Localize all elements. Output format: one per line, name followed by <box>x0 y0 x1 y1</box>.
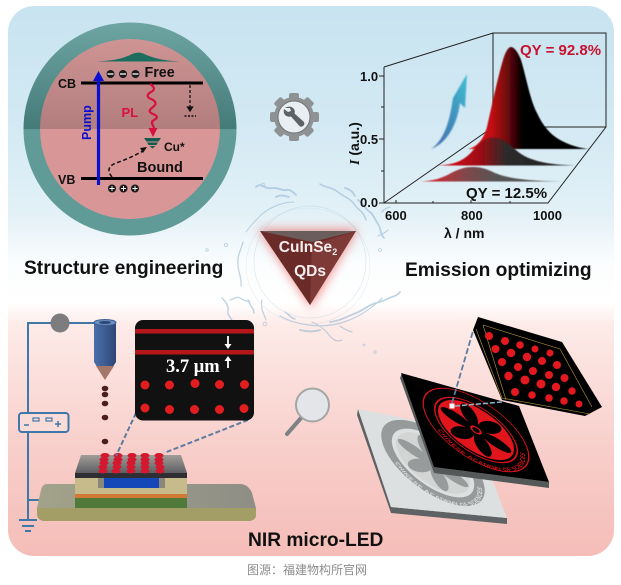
chart frame in perspective <box>384 33 606 203</box>
y axis tick labels: 0.0 <box>360 195 378 210</box>
icon: magnifying glass <box>287 388 329 434</box>
x axis tick labels: 1000 <box>533 208 562 223</box>
icon: gear with wrench <box>270 93 319 141</box>
micro-LED device <box>37 453 256 521</box>
x axis tick labels: 800 <box>461 208 483 223</box>
nonradiative dashed decay <box>184 85 196 116</box>
QD label: 2 <box>332 247 337 257</box>
substrate plate <box>37 484 256 521</box>
x axis tick labels: 600 <box>385 208 407 223</box>
x axis title: λ / nm <box>444 225 484 241</box>
battery <box>19 413 68 432</box>
water splash swirl <box>206 183 400 353</box>
circular band diagram <box>24 22 236 235</box>
grey emblem <box>381 420 485 506</box>
y axis ticks <box>379 76 510 203</box>
bound holes <box>108 184 139 192</box>
black emission plate with emblem <box>400 373 549 488</box>
layer stack <box>75 478 187 508</box>
band labels: VB <box>58 173 75 187</box>
top contact layer <box>75 455 187 478</box>
label: QY 92.8%: QY = 92.8% <box>520 42 601 59</box>
CB and VB lines <box>81 83 203 178</box>
x axis tick labels <box>385 208 562 223</box>
meter node <box>50 314 70 332</box>
magnified pixel block <box>473 317 602 416</box>
PL wavy arrow <box>148 84 158 137</box>
heading: emission optimizing: Emission optimizing <box>405 260 592 281</box>
QD label: CuInSe <box>279 239 332 256</box>
pixel selection dashed callout <box>449 331 502 409</box>
QD label <box>279 239 337 280</box>
red emblem <box>422 388 530 472</box>
red line pattern <box>135 329 254 354</box>
inset: micrograph <box>135 320 254 420</box>
CuInSe2 quantum dot triangle <box>258 229 358 308</box>
spectrum: mid QY peak <box>438 138 575 166</box>
Cu trap state <box>144 138 161 148</box>
free electrons <box>106 70 140 78</box>
label: Bound: Bound <box>137 160 183 176</box>
printing nozzle <box>94 320 116 380</box>
pump label: Pump <box>80 105 94 140</box>
heading: structure engineering: Structure engineering <box>24 258 223 279</box>
y axis tick labels: 1.0 <box>360 69 378 84</box>
width label: 3.7 μm <box>166 357 220 377</box>
zoom guide dashed lines <box>116 413 248 456</box>
label: PL: PL <box>122 105 138 120</box>
hole capture dashed arrow <box>109 147 147 177</box>
source caption: 图源：福建物构所官网 <box>247 562 367 577</box>
spectrum: low QY peak <box>420 167 562 182</box>
label: Cu*: Cu* <box>164 140 185 154</box>
QD label: QDs <box>294 263 326 280</box>
heading: NIR micro-LED: NIR micro-LED <box>248 530 384 551</box>
band labels: CB <box>58 77 76 91</box>
label: QY 12.5%: QY = 12.5% <box>466 185 547 202</box>
circuit wiring <box>19 314 96 531</box>
y axis tick labels <box>360 69 378 210</box>
growth arrow <box>431 74 467 149</box>
label: Free: Free <box>144 65 175 81</box>
ink droplets <box>102 386 108 444</box>
core-shell outer ring <box>24 22 236 235</box>
pump arrow <box>93 71 104 185</box>
y axis tick labels: 0.5 <box>360 132 378 147</box>
width arrows <box>224 336 232 368</box>
chart: emission spectra <box>346 33 606 241</box>
white substrate plate with emblem <box>357 409 507 524</box>
pixel dots <box>485 332 582 408</box>
y axis title: I (a.u.) <box>346 122 363 166</box>
band labels <box>58 77 76 187</box>
red pixel pillars <box>98 453 164 474</box>
red dot array <box>140 379 249 414</box>
spectrum: high QY peak <box>468 47 589 149</box>
emission envelope <box>97 53 180 62</box>
